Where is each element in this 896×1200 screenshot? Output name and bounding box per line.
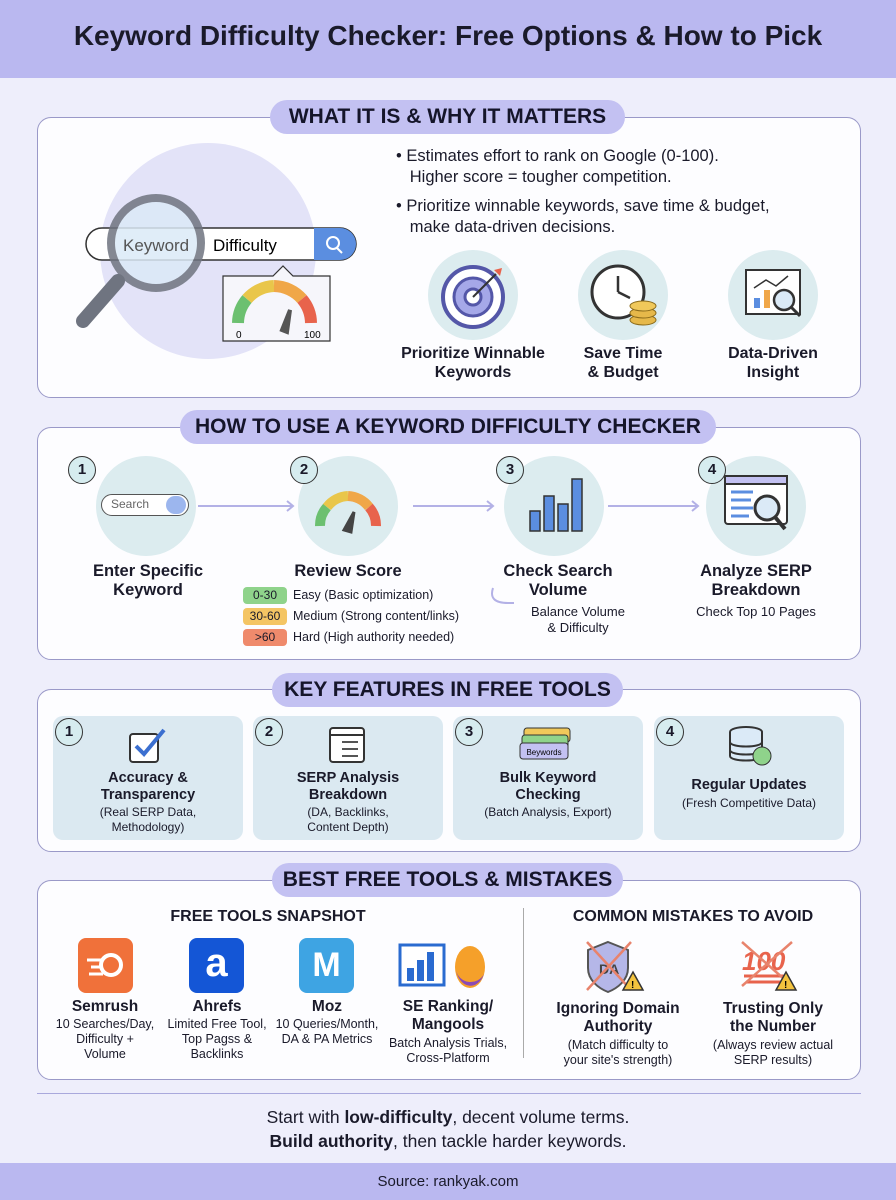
step 3: Check Search <box>503 562 613 580</box>
step 3: Balance Volume <box>531 604 625 619</box>
tools heading: FREE TOOLS SNAPSHOT <box>170 908 366 925</box>
card 3: (Batch Analysis, Export) <box>484 805 612 819</box>
tool: ahrefs: Backlinks <box>191 1047 243 1061</box>
step 2: 2 <box>300 461 308 478</box>
mistake: domain authority: (Match difficulty to <box>568 1038 668 1052</box>
panel: best tools & mistakes <box>37 880 861 1080</box>
divider <box>523 908 524 1058</box>
step 4: 4 <box>708 461 716 478</box>
bullet text: • Prioritize winnable keywords, save time & budget, <box>396 197 770 215</box>
tool: ahrefs: Ahrefs <box>192 998 242 1015</box>
card 2: 2 <box>265 723 273 740</box>
panel: how to use <box>37 427 861 660</box>
header band <box>0 0 896 78</box>
mistake: trusting the number: 100 <box>742 946 786 976</box>
panel: what it is: Insight <box>747 364 799 381</box>
pill: what it is <box>270 100 625 134</box>
tool: moz: Moz <box>312 998 342 1015</box>
mistake: domain authority: ! <box>631 980 634 991</box>
card 4: Regular Updates <box>691 777 807 793</box>
arrows between steps <box>198 500 700 604</box>
tool: ahrefs <box>167 938 267 1061</box>
takeaway text <box>267 1107 629 1151</box>
icon labels: Prioritize Winnable <box>401 345 545 362</box>
card 1: Methodology) <box>112 820 184 834</box>
card 2: Breakdown <box>309 787 387 803</box>
tool: moz <box>276 938 378 1046</box>
panel: what it is <box>37 117 861 398</box>
step 1 <box>68 456 203 599</box>
card 1: Transparency <box>101 787 195 803</box>
mistake: domain authority: your site's strength) <box>564 1053 672 1067</box>
tool: moz: M <box>312 946 341 984</box>
card 4: (Fresh Competitive Data) <box>682 796 816 810</box>
panel: key features <box>37 689 861 852</box>
tool: se ranking / mangools: Batch Analysis Trials, <box>389 1036 507 1050</box>
step 2: >60 <box>255 630 275 644</box>
pill: how to use: HOW TO USE A KEYWORD DIFFICULTY CHECKER <box>195 415 701 438</box>
illustration: search & gauge: 100 <box>304 330 321 341</box>
tool: se ranking / mangools <box>389 944 507 1065</box>
step 2 <box>243 456 459 646</box>
step 1: Search <box>111 497 149 511</box>
panel: what it is: & Budget <box>587 364 659 381</box>
tool: ahrefs: Limited Free Tool, <box>167 1017 267 1031</box>
title: Keyword Difficulty Checker: Free Options & How to Pick <box>74 20 822 51</box>
icon: target <box>428 250 518 340</box>
mistake: trusting the number <box>713 941 833 1067</box>
pill: best tools: BEST FREE TOOLS & MISTAKES <box>283 868 612 891</box>
tool: moz: 10 Queries/Month, <box>276 1017 378 1031</box>
step 4: Analyze SERP <box>700 562 812 580</box>
step 1: Keyword <box>113 581 183 599</box>
pill: best tools <box>272 863 623 897</box>
step 3 <box>496 456 625 635</box>
icon: clock coins <box>578 250 668 340</box>
card 2: SERP Analysis <box>297 770 399 786</box>
tool: semrush: 10 Searches/Day, <box>56 1017 154 1031</box>
mistakes heading: COMMON MISTAKES TO AVOID <box>573 908 813 925</box>
tool: semrush: Semrush <box>72 998 138 1015</box>
tool: se ranking / mangools: SE Ranking/ <box>403 998 493 1015</box>
mistake: domain authority <box>556 940 680 1067</box>
card 1: 1 <box>65 723 73 740</box>
step 2: Medium (Strong content/links) <box>293 609 459 623</box>
mistake: trusting the number: ! <box>784 980 787 991</box>
step 2: Easy (Basic optimization) <box>293 588 433 602</box>
tool: semrush <box>56 938 154 1061</box>
step 4 <box>696 456 816 619</box>
step 2: 0-30 <box>253 588 277 602</box>
mistake: trusting the number: SERP results) <box>734 1053 812 1067</box>
tool: ahrefs: Top Pagss & <box>182 1032 252 1046</box>
tool: se ranking / mangools: Mangools <box>412 1016 484 1033</box>
illustration: search & gauge: Keyword <box>123 236 189 255</box>
card 3: Bulk Keyword <box>500 770 596 786</box>
panel: what it is: Data-Driven <box>728 345 818 362</box>
mistake: domain authority: DA <box>599 961 619 977</box>
card 2 <box>253 716 443 840</box>
step 2: 30-60 <box>250 609 280 623</box>
tool: semrush: Difficulty + <box>76 1032 134 1046</box>
bullet text: Higher score = tougher competition. <box>410 168 672 186</box>
card 2: (DA, Backlinks, <box>307 805 389 819</box>
step 2: Hard (High authority needed) <box>293 630 454 644</box>
card 3: Checking <box>515 787 581 803</box>
icon labels: Keywords <box>435 364 511 381</box>
step 2: Review Score <box>294 562 402 580</box>
bullet text: make data-driven decisions. <box>410 218 615 236</box>
pill: key features <box>272 673 623 707</box>
divider line <box>37 1093 861 1094</box>
takeaway text: Start with low-difficulty, decent volume terms. <box>267 1107 629 1127</box>
illustration: search & gauge <box>76 143 357 359</box>
step 3: Volume <box>529 581 587 599</box>
step 4: Check Top 10 Pages <box>696 604 816 619</box>
card 1 <box>53 716 243 840</box>
card 1: (Real SERP Data, <box>100 805 196 819</box>
takeaway text: Build authority, then tackle harder keywords. <box>270 1131 626 1151</box>
footer <box>0 1163 896 1200</box>
illustration: search & gauge: 0 <box>236 330 242 341</box>
tool: se ranking / mangools: Cross-Platform <box>406 1051 490 1065</box>
step 1: Enter Specific <box>93 562 203 580</box>
card 4: 4 <box>666 723 674 740</box>
card 2: Content Depth) <box>307 820 389 834</box>
pill: how to use <box>180 410 716 444</box>
tool: ahrefs: a <box>205 941 228 985</box>
icon labels <box>401 345 545 381</box>
step 4: Breakdown <box>712 581 800 599</box>
footer: Source: rankyak.com <box>378 1173 518 1190</box>
mistake: trusting the number: the Number <box>730 1018 816 1035</box>
card 3: Beywords <box>526 748 562 757</box>
bullet text <box>396 147 770 236</box>
card 3: 3 <box>465 723 473 740</box>
mistake: domain authority: Ignoring Domain <box>556 1000 680 1017</box>
step 3: & Difficulty <box>547 620 609 635</box>
tool: semrush: Volume <box>84 1047 126 1061</box>
card 4 <box>654 716 844 840</box>
mistake: trusting the number: Trusting Only <box>723 1000 823 1017</box>
icon: chart magnifier <box>728 250 818 340</box>
tool: moz: DA & PA Metrics <box>282 1032 372 1046</box>
step 1: 1 <box>78 461 86 478</box>
mistake: trusting the number: (Always review actual <box>713 1038 833 1052</box>
step 3: 3 <box>506 461 514 478</box>
mistake: domain authority: Authority <box>584 1018 652 1035</box>
pill: what it is: WHAT IT IS & WHY IT MATTERS <box>289 105 606 128</box>
illustration: search & gauge: Difficulty <box>213 236 277 255</box>
card 3 <box>453 716 643 840</box>
card 1: Accuracy & <box>108 770 188 786</box>
panel: what it is: Save Time <box>584 345 662 362</box>
pill: key features: KEY FEATURES IN FREE TOOLS <box>284 678 611 701</box>
bullet text: • Estimates effort to rank on Google (0-100). <box>396 147 719 165</box>
